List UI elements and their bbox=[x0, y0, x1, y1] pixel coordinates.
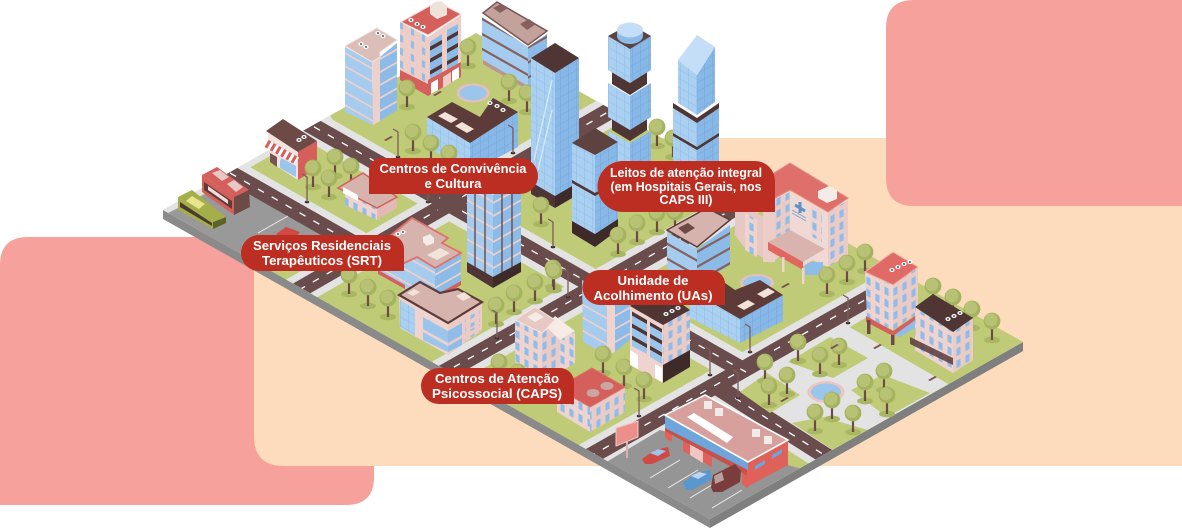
building: dark roof apartment bbox=[910, 294, 973, 373]
building: striped office near label bbox=[667, 208, 730, 285]
label: Centros de Atenção Psicossocial: Psicossocial (CAPS) bbox=[432, 386, 562, 401]
trees: slab bbox=[595, 346, 632, 389]
building: pink apartment bbox=[515, 307, 575, 378]
park bbox=[757, 295, 937, 435]
building: fire station bbox=[665, 395, 788, 488]
park plots bbox=[740, 337, 930, 450]
pond: upper bbox=[456, 84, 490, 102]
skyscraper: tall dark roof bbox=[531, 43, 579, 208]
vehicles: cars at fire station bbox=[642, 447, 741, 492]
building: low glass block bbox=[427, 98, 518, 172]
label: Centros de Convivência e Cultura: Centros de Convivência bbox=[380, 161, 527, 176]
building: CAPS bbox=[557, 368, 625, 432]
label: Serviços Residenciais Terapêuticos bbox=[241, 235, 404, 271]
label: Centros de Convivência e Cultura bbox=[369, 158, 538, 194]
building: dark striped apartment bbox=[630, 288, 690, 383]
trees: upper block bbox=[399, 39, 535, 115]
label: Centros de Atenção Psicossocial: Centros de Atenção bbox=[435, 371, 559, 386]
trees: back row right bbox=[925, 278, 1000, 343]
label: Serviços Residenciais Terapêuticos: Terapêuticos (SRT) bbox=[262, 253, 382, 268]
trees: SRT block bbox=[341, 267, 396, 320]
building: shop bbox=[264, 119, 317, 180]
billboard bbox=[616, 421, 638, 458]
skyscraper: lower bbox=[572, 128, 618, 247]
label: Unidade de Acolhimento bbox=[582, 270, 725, 305]
vehicle: green bus bbox=[178, 190, 226, 229]
ground platform bbox=[163, 33, 1023, 528]
background panel: pink upper right bbox=[886, 0, 1182, 206]
building: tall blue centre bbox=[467, 180, 521, 288]
building: hospital bbox=[735, 163, 848, 284]
trees: near CAPS bbox=[491, 354, 526, 394]
building: striped office bbox=[482, 2, 547, 90]
label: Centros de Atenção Psicossocial bbox=[421, 368, 574, 404]
vehicle: red double-decker bus bbox=[202, 167, 250, 215]
label: Unidade de Acolhimento: Acolhimento (UAs) bbox=[594, 288, 712, 303]
background panel: pink lower left bbox=[0, 237, 374, 505]
trees and lamps: near glass block bbox=[384, 91, 681, 175]
trees and lamps: central strip bbox=[488, 263, 570, 339]
building: low glass block right bbox=[690, 276, 783, 343]
building: lower office bbox=[399, 282, 482, 355]
roads and sidewalks bbox=[163, 105, 1000, 522]
label: Leitos de atenção integral: CAPS III) bbox=[660, 192, 712, 207]
pond: hospital bbox=[740, 274, 774, 292]
building: SRT residence bbox=[378, 218, 461, 300]
isometric city bbox=[163, 1, 1023, 528]
building: blue tower bbox=[345, 28, 397, 125]
label: Unidade de Acolhimento: Unidade de bbox=[618, 273, 688, 288]
parking areas bbox=[168, 187, 321, 254]
background panel: beige bbox=[254, 138, 1182, 466]
trees: centre bbox=[533, 197, 683, 290]
building: red apartment bbox=[400, 1, 461, 96]
label: Centros de Convivência e Cultura: e Cultura bbox=[424, 176, 482, 191]
building: pink corner apartment bbox=[865, 252, 918, 345]
trees: shop block bbox=[302, 149, 430, 203]
building: small house bbox=[338, 173, 397, 220]
tower: slanted top bbox=[673, 35, 719, 170]
vehicle: red car by sidewalk bbox=[276, 227, 300, 242]
label: Leitos de atenção integral bbox=[598, 161, 775, 212]
trees: hospital garden bbox=[781, 244, 873, 297]
tower: disc top bbox=[608, 22, 651, 185]
label: Serviços Residenciais Terapêuticos: Serviços Residenciais bbox=[253, 238, 391, 253]
building: blue and pink slab bbox=[582, 280, 632, 355]
label: Leitos de atenção integral: (em Hospitais Gerais, nos bbox=[610, 179, 762, 194]
label: Leitos de atenção integral: Leitos de atenção integral bbox=[610, 165, 762, 180]
tree: beside apartment bbox=[634, 324, 752, 417]
parking lines bbox=[240, 216, 742, 508]
